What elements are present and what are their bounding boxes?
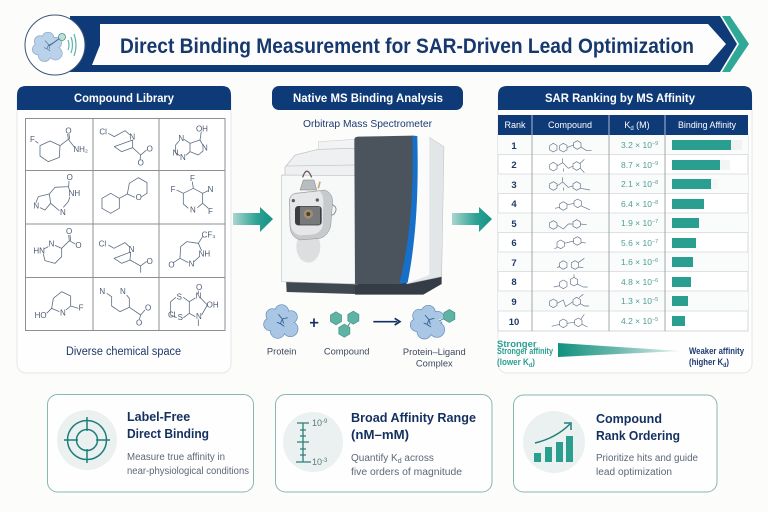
ion source [289,171,336,240]
molecule grid: Cl [168,310,176,319]
heading: SAR ranking: SAR Ranking by MS Affinity [545,93,696,105]
stronger label: Stronger affinity [497,346,554,357]
heading: SAR ranking [498,86,752,110]
text [351,411,476,478]
molecule grid: N [60,208,66,217]
title banner [25,15,749,75]
text: (nM–mM) [351,428,409,442]
rank numbers: 1 [511,141,517,152]
Kd values: −7 [652,219,658,225]
text: Direct Binding [127,427,209,441]
molecule grid: N [208,185,214,194]
panel: compound library [17,86,231,373]
molecule grid: F [79,304,84,313]
Kd values: 1.3 × 10 [621,296,652,306]
legend: affinity scale [497,339,745,369]
molecule grid: OH [196,125,208,134]
heading: compound library [17,86,231,110]
table header: d [630,126,634,132]
rank numbers: 9 [511,297,517,308]
rank numbers: 4 [511,199,517,210]
Kd values [621,140,658,326]
text [127,410,249,477]
compound [324,311,369,356]
stronger label: d [529,362,532,369]
molecule grid: N [129,245,135,254]
panel: native MS binding analysis [263,86,466,369]
instrument: mass spectrometer [282,135,444,295]
chevron: teal accent [722,16,749,72]
molecule grid: O [145,304,151,313]
text: Compound [596,412,662,426]
molecule grid: N [178,134,184,143]
molecule grid: NH [69,189,80,198]
molecule grid: O [138,158,144,167]
molecule grid: N [129,132,135,141]
molecule grid: N [60,308,66,317]
stronger label: Stronger [497,339,537,350]
icon: target [57,410,117,470]
weaker label [689,346,745,369]
table header: Binding Affinity [678,120,736,130]
molecule grid: N [190,206,196,215]
panel: SAR ranking [497,86,752,373]
weaker label: d [723,362,726,369]
heading: compound library: Compound Library [74,93,175,105]
molecule grid: N [33,202,39,211]
card: compound rank ordering [514,395,717,492]
Kd values: −8 [652,180,658,186]
icon: scale: -9 [322,419,328,425]
compound: Compound [324,346,369,356]
rank numbers: 2 [511,160,517,171]
molecule grid: N [120,287,126,296]
rank numbers: 6 [511,238,517,249]
heading: native MS: Native MS Binding Analysis [293,93,443,105]
Kd values: 1.9 × 10 [621,218,652,228]
Kd values: −6 [652,278,658,284]
rank numbers: 5 [511,219,517,230]
Kd values: −5 [652,317,658,323]
text: Label-Free [127,410,190,424]
arrow: MS to ranking [452,207,492,232]
text: Broad Affinity Range [351,411,476,425]
icon: scale: 10 [312,457,322,467]
Kd values: −7 [652,239,658,245]
plus sign [310,318,318,327]
molecule grid: N [202,144,208,153]
Kd values: 3.2 × 10 [621,140,652,150]
text: d [398,458,402,465]
text: five orders of magnitude [351,467,462,478]
molecule grid: O [147,257,153,266]
gradient wedge [558,343,680,357]
Kd values: 6.4 × 10 [621,199,652,209]
text: Measure true affinity in [127,452,225,463]
ranking table [498,115,748,331]
table header: K [624,120,630,130]
molecule grid: N [49,240,55,249]
molecule grid: S [177,292,182,301]
icon: scale [283,412,343,472]
molecule grid: O [136,318,142,327]
Kd values: 4.2 × 10 [621,316,652,326]
protein [263,304,298,356]
molecule grid: O [66,227,72,236]
table header [498,115,748,135]
complex: Complex [416,359,453,369]
stronger label [497,339,554,369]
molecule grid: N [196,291,202,300]
text: Quantify K [351,453,398,464]
Kd values: −9 [652,161,658,167]
molecule grid [25,118,225,331]
banner ribbon [70,16,737,72]
text [596,412,698,478]
icon: scale: -3 [322,458,328,464]
weaker label: Weaker affinity [689,346,745,357]
molecule grid: CF₃ [202,230,216,239]
caption: diverse chemical space: Diverse chemical space [66,346,181,358]
rank numbers: 7 [511,258,517,269]
molecule grid: F [30,135,35,144]
text: near-physiological conditions [127,466,249,477]
weaker label: (higher K [689,357,731,368]
affinity bars [672,140,742,326]
molecule grid: O [196,283,202,292]
molecule grid: O [147,144,153,153]
molecule grid: O [136,193,142,202]
molecule grid: O [75,241,82,250]
text: Rank Ordering [596,429,680,443]
table header: (M) [634,120,650,130]
complex [403,305,466,369]
compound thumbnails [550,141,592,229]
molecule grid: N [189,260,195,269]
molecule grid: Cl [99,128,107,137]
icon: scale: 10 [312,418,322,428]
text: across [402,453,434,464]
molecule grid: HN [33,246,45,255]
Kd values: 5.6 × 10 [621,238,652,248]
heading: native MS [272,86,463,110]
diagram: protein plus compound forms complex [263,304,466,369]
card: broad affinity range [276,394,492,492]
molecule grid: N [180,153,186,162]
molecule grid: F [208,207,213,216]
molecule grid: N [99,287,105,296]
molecule grid: Cl [99,240,106,249]
card: label-free direct binding [48,394,254,492]
Kd values: −5 [652,297,658,303]
table header: Compound [548,120,592,130]
stronger label: (lower K [497,357,534,368]
rank numbers: 3 [511,180,517,191]
stronger label: ) [532,357,535,368]
molecule grid: OH [207,300,219,309]
molecule grid: NH₂ [73,145,88,154]
Kd values: 8.7 × 10 [621,160,652,170]
molecule grid: NH [199,250,210,259]
icon: protein binding in circle [25,15,85,75]
molecule grid: O [67,173,73,182]
molecule grid: HO [35,311,47,320]
table header: Rank [504,120,526,130]
Kd values: 1.6 × 10 [621,257,652,267]
rank numbers [509,141,519,328]
Kd values: 2.1 × 10 [621,179,652,189]
molecule grid: S [178,313,183,322]
complex: Protein–Ligand [403,347,466,357]
Kd values: 4.8 × 10 [621,277,652,287]
text: Prioritize hits and guide [596,453,698,464]
weaker label: ) [726,357,729,368]
molecule grid: N [196,312,202,321]
icon: rising bars [523,411,585,473]
molecule grid: F [171,185,176,194]
Kd values: −9 [652,141,658,147]
rank numbers: 10 [509,317,519,328]
molecule grid: O [168,260,175,269]
rank numbers: 8 [511,277,517,288]
arrow: library to MS [233,207,273,232]
text: lead optimization [596,467,672,478]
reaction arrow [373,318,400,325]
molecule grid: F [190,174,195,183]
Kd values: −6 [652,258,658,264]
subtitle: orbitrap: Orbitrap Mass Spectrometer [303,118,432,130]
molecule grid: N [173,148,179,157]
molecule grid: O [65,126,72,135]
protein: Protein [267,346,296,356]
Kd values: −8 [652,200,658,206]
title: Direct Binding Measurement for SAR-Driven Lead Optimization [120,35,694,58]
